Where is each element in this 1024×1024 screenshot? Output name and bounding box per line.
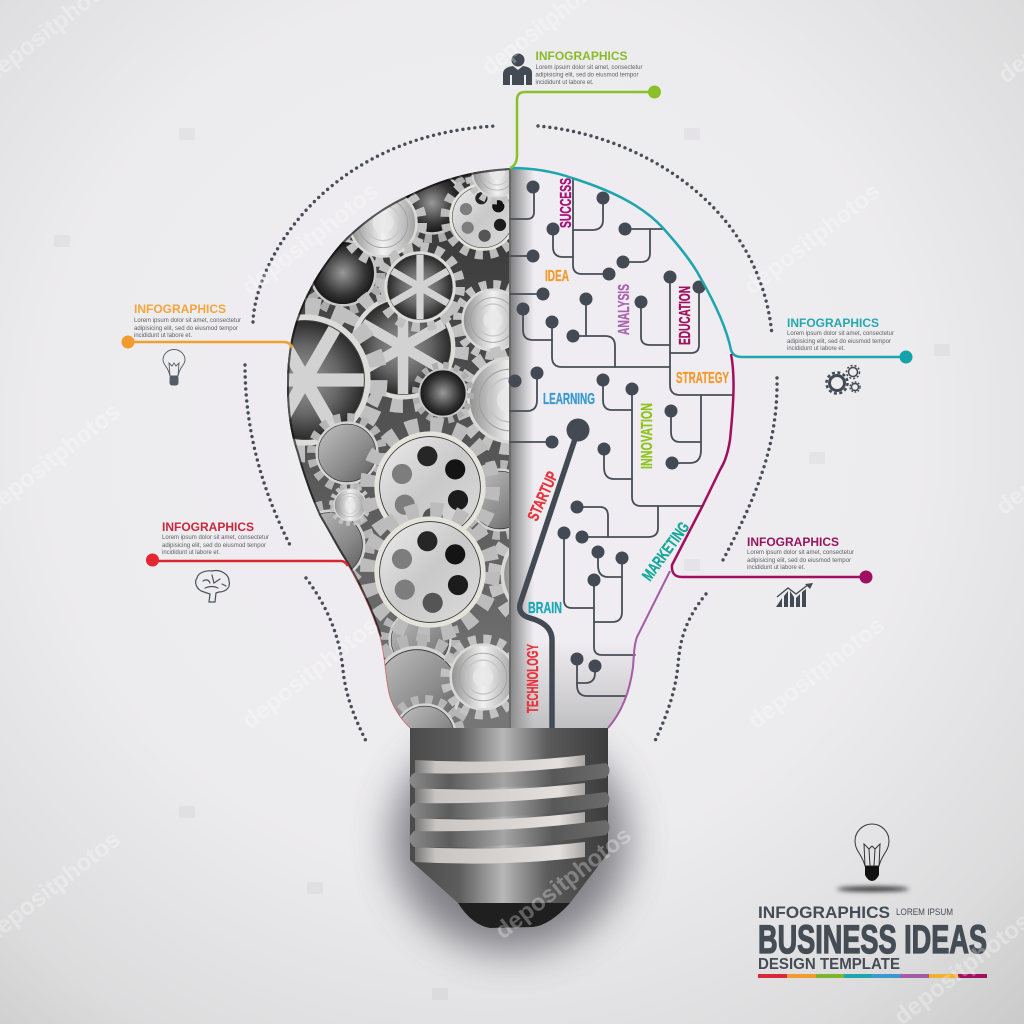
- circuit labels: LEARNING: [543, 391, 595, 408]
- callout: top green: INFOGRAPHICS: [536, 51, 628, 63]
- title block: INFOGRAPHICS: [758, 904, 890, 922]
- callout: right teal: incididunt ut labore et.: [787, 345, 845, 352]
- circuit labels: INNOVATION: [639, 403, 656, 469]
- circuit nodes: [508, 180, 706, 672]
- circuit labels: TECHNOLOGY: [525, 644, 542, 713]
- circuit labels: IDEA: [545, 268, 569, 285]
- icon: rising chart: [776, 583, 813, 607]
- callout: right teal: Lorem ipsum dolor sit amet, consectetur: [787, 330, 895, 337]
- title block: LOREM IPSUM: [896, 907, 953, 917]
- callout: right teal: adipisicing elit, sed do eiusmod tempor: [787, 338, 892, 345]
- dotted arc: top left: [253, 126, 496, 322]
- callout: left red: INFOGRAPHICS: [162, 522, 254, 534]
- callout: left orange: INFOGRAPHICS: [134, 304, 226, 316]
- centre divider strip: [509, 168, 511, 728]
- watermarks: depositphotos: [237, 178, 384, 301]
- bulb left half: gears: [287, 168, 509, 728]
- circuit labels: STRATEGY: [676, 370, 729, 387]
- callout: left red: adipisicing elit, sed do eiusmod tempor: [162, 542, 267, 549]
- watermarks: depositphotos: [739, 178, 886, 301]
- dotted arc: lower left: [306, 578, 368, 745]
- callout: left orange: incididunt ut labore et.: [134, 332, 192, 339]
- bulb outline: purple: [608, 571, 670, 728]
- circuit lines: [510, 178, 733, 696]
- callout: right teal: [787, 318, 912, 364]
- circuit labels: EDUCATION: [677, 286, 694, 345]
- dotted arc: top right: [538, 126, 772, 335]
- lamp base: [410, 728, 610, 928]
- bulb outline: magenta connector: [672, 354, 866, 577]
- dotted arc: middle left: [245, 365, 290, 545]
- thick circuit trunk: [520, 418, 590, 728]
- dotted arc: lower right: [653, 594, 706, 745]
- base shadow: [392, 728, 628, 952]
- circuit labels: BRAIN: [528, 600, 562, 617]
- circuit labels: [525, 178, 729, 713]
- watermarks: depositphotos: [743, 612, 890, 735]
- callout: right magenta: adipisicing elit, sed do eiusmod tempor: [747, 557, 852, 564]
- icon: brain: [196, 571, 229, 602]
- callout: right magenta: INFOGRAPHICS: [747, 537, 839, 549]
- callout: right magenta: [747, 537, 872, 584]
- callout: left orange: [122, 304, 292, 348]
- circuit labels: MARKETING: [639, 519, 693, 584]
- watermarks: depositphotos: [237, 612, 384, 735]
- icon: gears: [826, 366, 860, 394]
- colour stripe: [758, 974, 987, 978]
- bottom bulb icon: [837, 824, 909, 892]
- callout: top green: [510, 51, 661, 168]
- callout: left red: incididunt ut labore et.: [162, 549, 220, 556]
- callout: right magenta: Lorem ipsum dolor sit amet, consectetur: [747, 549, 855, 556]
- callout: left red: [146, 522, 348, 566]
- callout: top green: adipisicing elit, sed do eiusmod tempor: [536, 72, 639, 78]
- callout: top green: incididunt ut labore et.: [536, 79, 594, 86]
- circuit labels: STARTUP: [525, 469, 562, 524]
- bulb right half: panel: [511, 169, 632, 728]
- dotted arc: middle right: [723, 378, 777, 560]
- callout: left orange: Lorem ipsum dolor sit amet, consectetur: [134, 317, 242, 324]
- callout: right magenta: incididunt ut labore et.: [747, 564, 805, 571]
- title block: DESIGN TEMPLATE: [758, 956, 900, 973]
- circuit labels: ANALYSIS: [616, 284, 633, 335]
- title block: [758, 904, 987, 973]
- watermarks: depositphotos: [490, 822, 637, 945]
- callout: top green: Lorem ipsum dolor sit amet, consectetur: [536, 64, 643, 71]
- bulb outline: lower left red: [345, 560, 410, 728]
- camera watermarks: [54, 128, 950, 1000]
- icon: business person: [503, 54, 532, 85]
- callout: right teal: INFOGRAPHICS: [787, 318, 879, 330]
- bulb outline: teal connector: [510, 168, 906, 357]
- circuit labels: SUCCESS: [558, 178, 575, 228]
- callout: left red: Lorem ipsum dolor sit amet, consectetur: [162, 534, 270, 541]
- callout: left orange: adipisicing elit, sed do eiusmod tempor: [134, 325, 239, 332]
- icon: light bulb: [163, 350, 185, 385]
